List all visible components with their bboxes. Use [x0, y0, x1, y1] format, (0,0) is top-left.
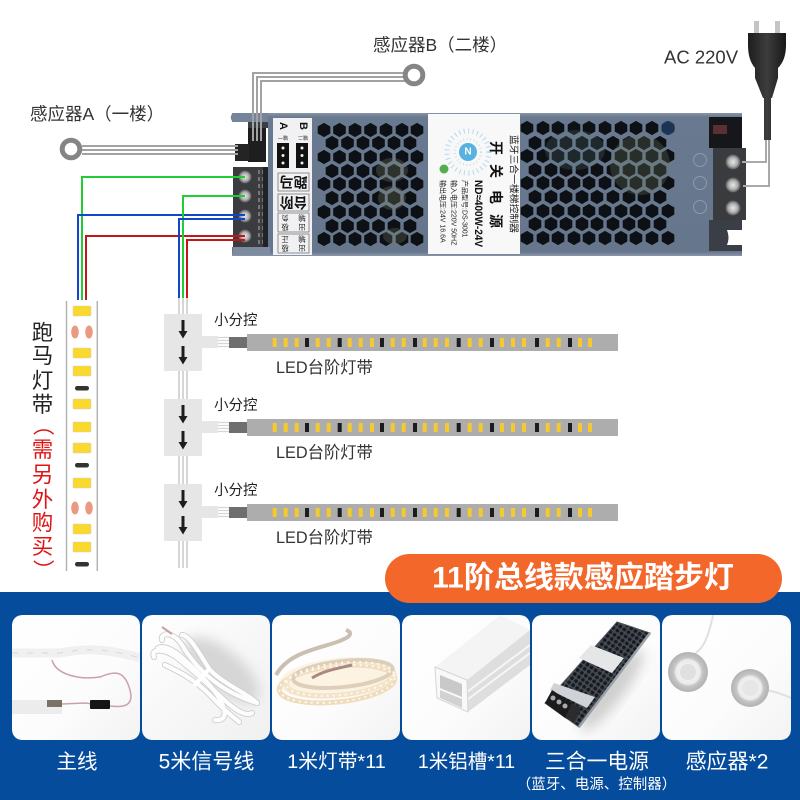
step strip unit 2: 小分控	[214, 397, 258, 414]
step strip unit 3: 小分控	[214, 482, 258, 499]
white product label: 产品型号:DS-3001	[460, 180, 470, 238]
white product label: 关	[488, 164, 504, 178]
label: must be purchased separately: ）	[30, 559, 54, 581]
left white control panel: B	[297, 122, 309, 130]
card: 5 m signal cable	[142, 615, 270, 740]
power supply unit	[229, 113, 748, 256]
white product label: 电	[488, 190, 504, 204]
card: 1 m LED strip coil	[272, 615, 400, 740]
card caption: main line: 主线	[56, 750, 98, 774]
title pill	[385, 554, 782, 603]
step strip unit 2: LED台阶灯带	[276, 444, 373, 462]
left white control panel: 极	[281, 244, 289, 254]
white product label	[428, 114, 520, 254]
label: running lamp strip: 灯	[32, 369, 53, 393]
running-strip power and signal wires	[78, 177, 245, 300]
left white control panel: 输二	[298, 134, 308, 141]
right AC terminal block	[709, 117, 748, 252]
left white control panel: A	[277, 122, 289, 130]
label: must be purchased separately: 外	[32, 488, 53, 512]
left white control panel: 输一	[278, 134, 288, 141]
running LED strip	[66, 301, 98, 571]
label: must be purchased separately: 另	[32, 463, 53, 487]
blue contents band	[0, 592, 800, 800]
step strip unit 1: 小分控	[214, 312, 258, 329]
card caption: sensors: 感应器*2	[686, 750, 768, 774]
label: sensor B: 感应器B（二楼）	[373, 35, 507, 55]
card: three-in-one power supply	[532, 615, 660, 740]
card: main line	[12, 615, 140, 740]
AC plug and cord	[742, 21, 786, 186]
label: sensor A: 感应器A（一楼）	[30, 104, 164, 124]
left white control panel: 输	[298, 234, 306, 244]
white product label: 蓝牙三合一楼梯控制器	[508, 135, 520, 233]
left white control panel: 极	[281, 222, 289, 232]
left white control panel: 出	[298, 244, 306, 254]
left white control panel	[273, 118, 312, 255]
card: sensors	[662, 615, 791, 740]
sensor B ring and wires	[253, 66, 423, 141]
left white control panel: 跑马	[280, 174, 308, 190]
right hexagon vent grid	[521, 121, 675, 245]
step strip unit 1	[164, 312, 618, 377]
card caption: 1 m aluminium channel: 1米铝槽*11	[418, 751, 515, 773]
phase markings N L ground	[694, 154, 706, 214]
step strip unit 3: LED台阶灯带	[276, 529, 373, 547]
card caption: 1 m LED strip: 1米灯带*11	[287, 751, 386, 773]
label: must be purchased separately	[30, 414, 54, 581]
step strip unit 1: LED台阶灯带	[276, 359, 373, 377]
step strip unit 2	[164, 397, 618, 462]
white product label: 源	[488, 214, 504, 228]
white product label: 输出电压:24V 16.6A	[438, 180, 448, 243]
sensor A ring and wires	[62, 140, 238, 158]
white product label: 开	[488, 141, 504, 155]
title pill: 11阶总线款感应踏步灯	[432, 562, 734, 594]
left white control panel: 出	[298, 222, 306, 232]
left white control panel: 台阶	[280, 194, 308, 210]
card caption: three-in-one power supply: 三合一电源	[545, 750, 649, 774]
label: running lamp strip: 跑	[32, 321, 53, 345]
white product label: 输入电压:220V 50HZ	[450, 180, 458, 246]
label: must be purchased separately: 买	[32, 535, 53, 559]
label: running lamp strip: 带	[32, 393, 53, 417]
left hexagon vent grid	[318, 123, 423, 246]
white product label: N	[464, 146, 472, 158]
step strip unit 3	[164, 482, 618, 547]
card: 1 m aluminium channel	[402, 615, 530, 740]
label: must be purchased separately: 购	[32, 511, 53, 535]
card caption: 5 m signal cable: 5米信号线	[159, 750, 254, 774]
left white control panel: 负	[281, 214, 289, 224]
bus trunk lines	[179, 298, 187, 568]
label: must be purchased separately: （	[30, 414, 54, 436]
label: AC 220V: AC 220V	[664, 46, 739, 68]
label: running lamp strip: 马	[32, 344, 53, 368]
left terminal cut-out	[229, 113, 270, 255]
PSU metal body	[232, 113, 742, 256]
label: must be purchased separately: 需	[32, 438, 53, 462]
left white control panel: 正	[281, 234, 289, 244]
stair-strip power and signal wires	[179, 196, 245, 298]
left white control panel: 输	[298, 214, 306, 224]
card sub-caption: bluetooth, power, controller: （蓝牙、电源、控制器）	[517, 776, 676, 793]
label: running lamp strip	[32, 321, 53, 417]
white product label: ND≈400W-24V	[472, 180, 484, 248]
